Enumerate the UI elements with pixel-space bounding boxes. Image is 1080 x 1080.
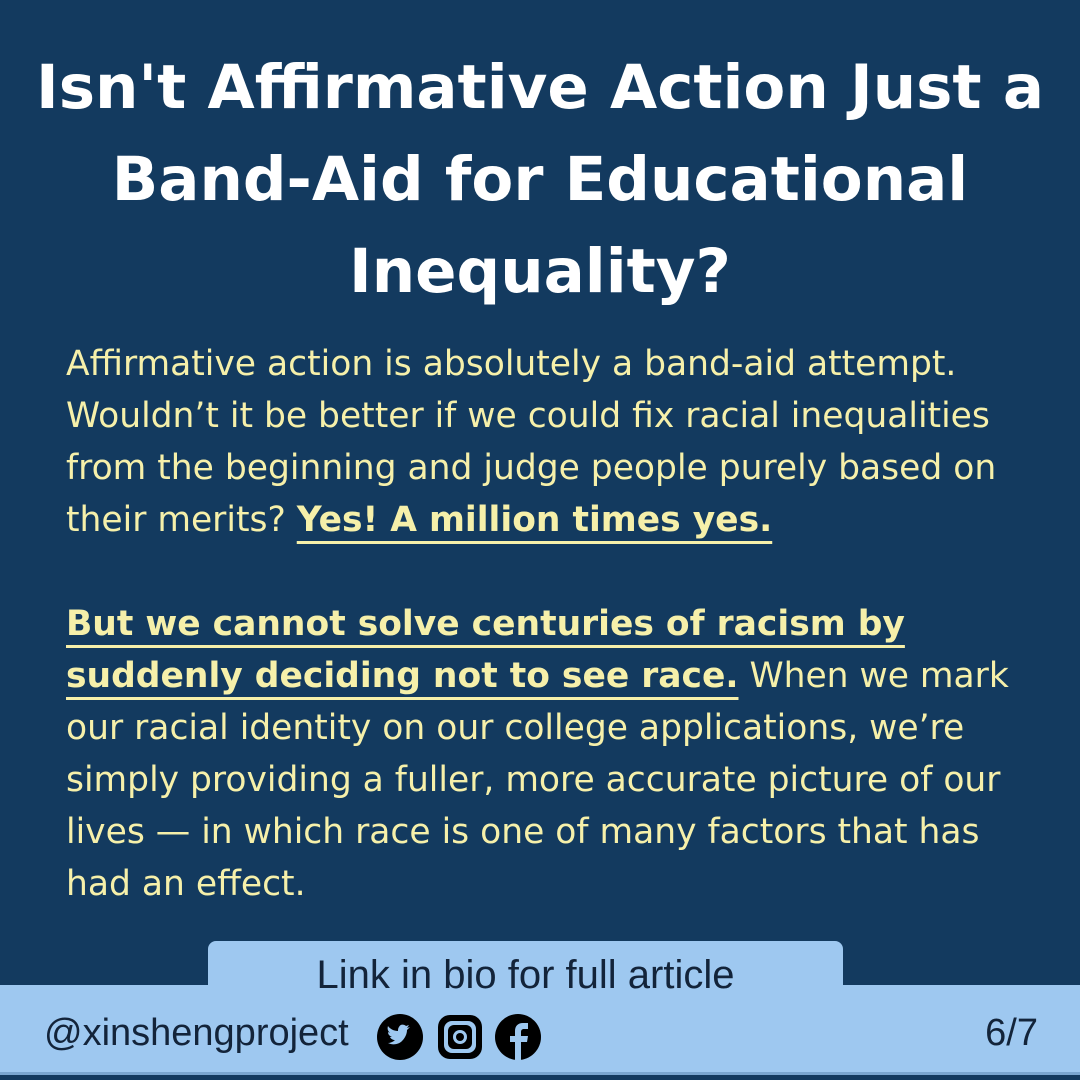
body text: our racial identity on our college applications, we’re xyxy=(66,708,964,748)
body text: suddenly deciding not to see race. When we mark xyxy=(66,656,1009,696)
title: Band-Aid for Educational xyxy=(112,144,968,215)
handle: @xinshengproject xyxy=(44,1012,349,1054)
body text: Wouldn’t it be better if we could fix racial inequalities xyxy=(66,396,990,436)
title: Isn't Affirmative Action Just a xyxy=(36,52,1044,123)
body text: from the beginning and judge people purely based on xyxy=(66,448,996,488)
footer tab: link in bio xyxy=(208,941,843,1001)
body text: lives — in which race is one of many factors that has xyxy=(66,812,980,852)
body text xyxy=(66,344,1009,904)
body text: their merits? Yes! A million times yes. xyxy=(66,500,772,540)
social icons xyxy=(377,1014,541,1060)
title xyxy=(36,52,1044,307)
page number: 6/7 xyxy=(985,1012,1038,1054)
body text: had an effect. xyxy=(66,864,306,904)
body text: Affirmative action is absolutely a band-aid attempt. xyxy=(66,344,956,384)
body text: simply providing a fuller, more accurate picture of our xyxy=(66,760,1000,800)
footer tab: link in bio: Link in bio for full article xyxy=(317,953,734,997)
title: Inequality? xyxy=(349,236,731,307)
body text: But we cannot solve centuries of racism by xyxy=(66,604,905,644)
footer bar xyxy=(0,985,1080,1075)
